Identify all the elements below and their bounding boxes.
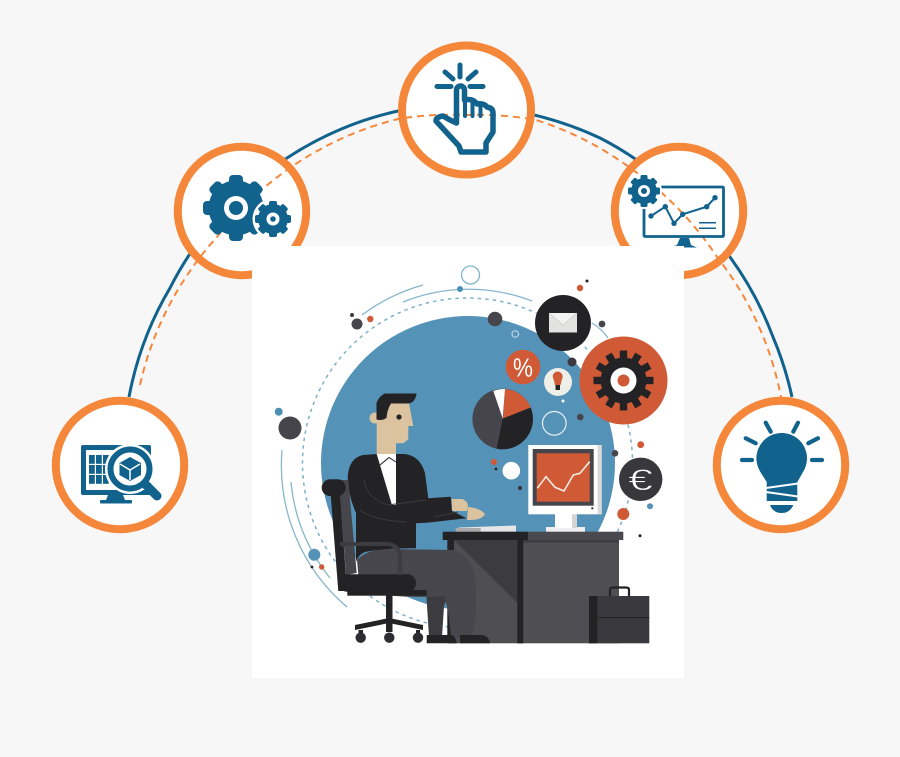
icon: large gear xyxy=(203,175,269,241)
shirt xyxy=(377,454,396,505)
node: monitor with chart xyxy=(615,147,743,275)
icon: monitor with magnifier xyxy=(81,444,157,504)
icon: chart monitor xyxy=(626,173,724,248)
businessman xyxy=(348,394,490,643)
icon: euro bubble: € xyxy=(628,464,653,497)
thin orbit lines xyxy=(281,285,608,607)
computer monitor xyxy=(528,445,602,532)
node: clicking hand xyxy=(402,46,531,174)
desk xyxy=(443,532,623,643)
briefcase xyxy=(589,588,649,643)
icon: envelope bubble xyxy=(535,295,591,351)
hands xyxy=(452,499,468,511)
illustration: businessman at desk xyxy=(275,266,668,643)
far leg xyxy=(426,560,452,637)
shoes xyxy=(427,635,490,643)
node: gears xyxy=(178,147,306,275)
icon: orange gear bubble xyxy=(580,336,668,424)
near trouser leg xyxy=(357,549,476,638)
node backgrounds xyxy=(56,46,845,529)
icon: percent bubble: % xyxy=(513,352,533,382)
node: inspection monitor xyxy=(56,401,184,529)
head xyxy=(377,403,413,454)
panel: white illustration square xyxy=(252,246,684,678)
hair xyxy=(376,394,417,420)
icon: small gear xyxy=(252,198,294,240)
solid blue arc xyxy=(129,106,792,397)
office chair seat and back xyxy=(322,479,427,596)
keyboard xyxy=(456,526,516,532)
blue background circle xyxy=(321,316,615,610)
dashed orbit xyxy=(302,298,632,628)
icon: percent bubble xyxy=(506,350,540,384)
floating dots xyxy=(275,266,653,570)
node: light bulb xyxy=(717,401,845,529)
pie chart xyxy=(472,389,533,449)
office chair base xyxy=(355,595,423,643)
icon: euro bubble xyxy=(619,458,662,501)
icon: pointer hand xyxy=(436,65,493,152)
icon: bulb xyxy=(742,423,822,513)
jacket xyxy=(348,454,467,562)
icon: idea bubble xyxy=(544,368,572,396)
icon: settings gear xyxy=(626,173,662,209)
dashed orange arc xyxy=(140,115,781,397)
